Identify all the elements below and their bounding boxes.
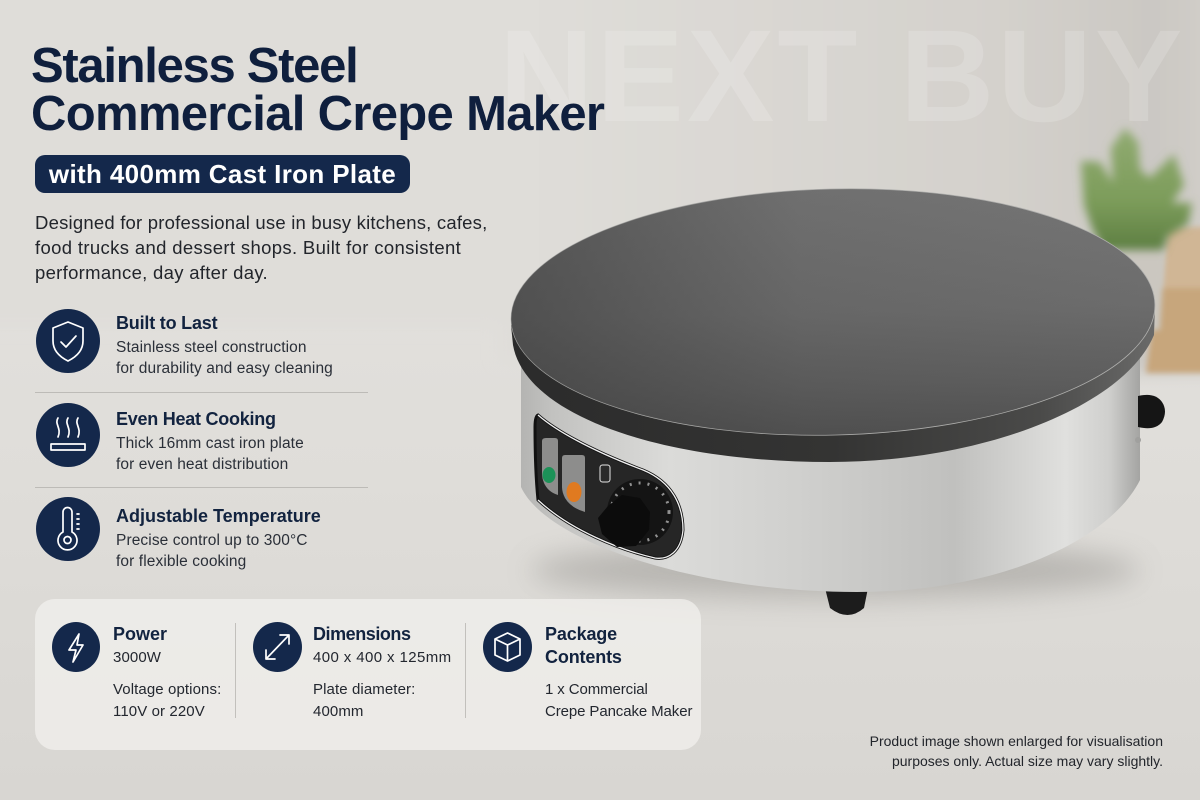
spec detail: Crepe Pancake Maker	[545, 702, 692, 720]
steel body	[521, 345, 1140, 592]
spec detail: 400mm	[313, 702, 364, 720]
spec: dimensions	[253, 622, 452, 720]
feature heading: Adjustable Temperature	[116, 506, 321, 526]
dial	[607, 479, 673, 545]
spec heading: Contents	[545, 647, 622, 667]
feature: built to last	[36, 309, 333, 377]
plate top	[508, 181, 1158, 443]
icon: shield	[36, 309, 100, 373]
feature heading: Even Heat Cooking	[116, 409, 276, 429]
spec detail: Voltage options:	[113, 681, 221, 698]
counter shadow	[530, 542, 1140, 598]
disclaimer	[870, 733, 1163, 769]
icon: box	[483, 622, 532, 672]
thermometer icon	[600, 465, 610, 482]
spec: package contents	[483, 622, 692, 720]
spec detail: 110V or 220V	[113, 702, 205, 720]
power connector	[1135, 395, 1165, 443]
spec detail: Plate diameter:	[313, 681, 415, 698]
black rim	[511, 305, 1155, 462]
feature heading: Built to Last	[116, 313, 217, 333]
feature text: for even heat distribution	[116, 456, 288, 473]
feature text: Thick 16mm cast iron plate	[116, 435, 304, 452]
spec heading: Dimensions	[313, 624, 411, 644]
spec: power	[52, 622, 221, 720]
intro text: Designed for professional use in busy kitchens, cafes,	[35, 212, 488, 233]
intro text	[35, 212, 488, 283]
spec detail: 1 x Commercial	[545, 681, 648, 698]
feature text	[116, 339, 333, 377]
title: Commercial Crepe Maker	[31, 87, 604, 141]
icon: thermometer	[36, 497, 100, 561]
subtitle pill: with 400mm Cast Iron Plate	[49, 159, 396, 189]
foot	[825, 588, 868, 615]
feature text: for durability and easy cleaning	[116, 360, 333, 377]
indicator: orange	[562, 455, 585, 512]
indicator: green	[542, 438, 558, 495]
feature text: Stainless steel construction	[116, 339, 307, 356]
feature text: for flexible cooking	[116, 553, 246, 570]
wooden board	[1146, 227, 1200, 373]
spec detail	[113, 681, 221, 720]
intro text: food trucks and dessert shops. Built for consistent	[35, 237, 461, 258]
icon: arrows	[253, 622, 302, 672]
icon: heat	[36, 403, 100, 467]
crepe maker product	[508, 181, 1165, 615]
spec text: 3000W	[113, 649, 161, 666]
feature text	[116, 435, 304, 473]
feature: adjustable temperature	[36, 497, 321, 570]
spec heading	[545, 624, 622, 667]
spec detail	[313, 681, 415, 720]
spec detail	[545, 681, 692, 720]
watermark: NEXT BUY	[499, 2, 1185, 149]
spec heading: Power	[113, 624, 167, 644]
icon: bolt	[52, 622, 100, 672]
feature text: Precise control up to 300°C	[116, 532, 308, 549]
control panel	[535, 415, 683, 558]
spec heading: Package	[545, 624, 617, 644]
disclaimer: purposes only. Actual size may vary slightly.	[892, 753, 1163, 769]
knob	[598, 495, 650, 547]
feature: even heat	[36, 403, 304, 473]
specs panel	[35, 599, 701, 750]
spec text: 400 x 400 x 125mm	[313, 649, 452, 666]
potted plant	[1081, 128, 1192, 330]
feature text	[116, 532, 308, 570]
intro text: performance, day after day.	[35, 262, 268, 283]
title	[31, 39, 604, 141]
disclaimer: Product image shown enlarged for visualisation	[870, 733, 1163, 749]
title: Stainless Steel	[31, 39, 357, 93]
